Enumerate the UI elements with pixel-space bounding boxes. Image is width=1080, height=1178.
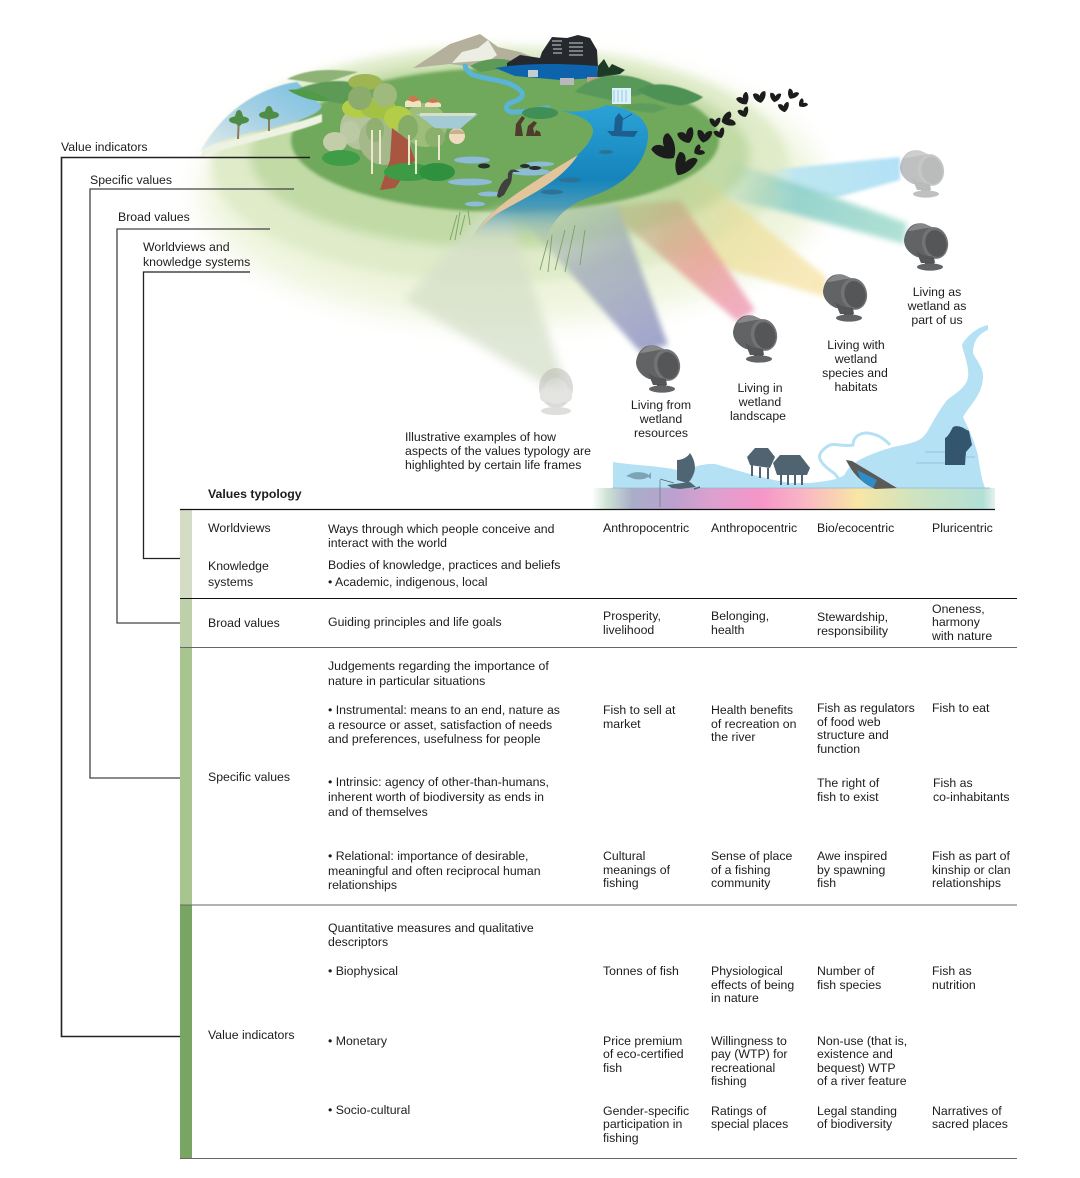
icon: lamp living as wetland <box>904 223 951 271</box>
beam: pale unlit lamp <box>405 207 565 385</box>
relational values: • Relational: importance of desirable, <box>328 849 528 863</box>
canoe <box>846 460 897 489</box>
sea and beach <box>200 82 322 152</box>
sailboat with fisher <box>677 453 695 483</box>
row: specific values <box>208 659 1011 892</box>
palm trees <box>229 106 279 139</box>
life frame label: in landscape: wetland <box>738 395 781 409</box>
row: value indicators: of eco-certified <box>603 1047 684 1061</box>
houses <box>528 70 538 77</box>
row: value indicators: Ratings of <box>711 1104 766 1118</box>
row: value indicators: sacred places <box>932 1117 1008 1131</box>
river <box>465 64 550 112</box>
row: specific values: Fish as <box>933 776 973 790</box>
icon: lamp living from resources <box>636 345 683 393</box>
row: specific values: community <box>711 876 771 890</box>
row: knowledge systems <box>208 558 560 589</box>
row: worldviews: interact with the world <box>328 536 447 550</box>
row: broad values: Stewardship, <box>817 610 888 624</box>
row: value indicators: fishing <box>711 1074 747 1088</box>
table rules <box>180 508 995 510</box>
landscape illustration <box>200 34 703 272</box>
bar: broad values <box>180 599 192 647</box>
row: value indicators: Physiological <box>711 964 783 978</box>
relational values: meaningful and often reciprocal human <box>328 864 541 878</box>
row: specific values: The right of <box>817 776 879 790</box>
row: specific values: Judgements regarding the importance of <box>328 659 549 673</box>
row: value indicators: bequest) WTP <box>817 1061 896 1075</box>
row: specific values: Fish to sell at <box>603 703 675 717</box>
row: value indicators: fish species <box>817 978 881 992</box>
row: value indicators: Fish as <box>932 964 972 978</box>
bracket label: value indicators: Value indicators <box>61 140 148 154</box>
row: specific values: structure and <box>817 728 889 742</box>
row: specific values: Specific values <box>208 770 290 784</box>
row: worldviews: Worldviews <box>208 521 271 535</box>
row: value indicators: descriptors <box>328 935 388 949</box>
row: specific values: Health benefits <box>711 703 793 717</box>
monetary indicators: • Monetary <box>328 1034 388 1048</box>
relational values: relationships <box>328 878 397 892</box>
row: value indicators: participation in <box>603 1117 682 1131</box>
bottom wetland scene <box>592 325 995 509</box>
waterfall <box>612 88 631 104</box>
row: broad values: Belonging, <box>711 609 769 623</box>
life frame label: with species: Living with <box>827 338 885 352</box>
row: value indicators: Price premium <box>603 1034 682 1048</box>
row: specific values: of recreation on <box>711 717 797 731</box>
ducks <box>478 164 541 170</box>
row: specific values: fish <box>817 876 836 890</box>
beam: living from wetland resources <box>510 205 668 352</box>
row: value indicators: special places <box>711 1117 788 1131</box>
row: value indicators: recreational <box>711 1061 775 1075</box>
row: value indicators <box>208 921 1008 1145</box>
row: specific values: of a fishing <box>711 863 771 877</box>
row: broad values: Oneness, <box>932 602 985 616</box>
row: specific values: by spawning <box>817 863 886 877</box>
background: nested value ellipses <box>202 47 822 322</box>
row: value indicators: Legal standing <box>817 1104 897 1118</box>
bracket: worldviews <box>144 272 250 558</box>
rice terraces <box>416 114 478 129</box>
giraffes and wildlife <box>522 107 558 119</box>
row: specific values: Cultural <box>603 849 645 863</box>
row: specific values: nature in particular situations <box>328 674 485 688</box>
colour strip <box>592 488 995 509</box>
row: specific values: kinship or clan <box>932 863 1011 877</box>
beam: living in wetland landscape <box>615 200 755 322</box>
row: knowledge systems: Bodies of knowledge, practices and beliefs <box>328 558 560 572</box>
row: worldviews: Bio/ecocentric <box>817 521 894 535</box>
beam: living with species <box>655 175 826 297</box>
hills left <box>287 70 358 84</box>
row: specific values: fishing <box>603 876 639 890</box>
row: value indicators: Tonnes of fish <box>603 964 679 978</box>
row: value indicators: Value indicators <box>208 1028 295 1042</box>
life frame label: with species: wetland <box>834 352 877 366</box>
city <box>507 35 598 68</box>
bracket label: specific values: Specific values <box>90 173 172 187</box>
boat and person <box>607 131 638 137</box>
water shape <box>613 325 988 488</box>
beam: pale blue <box>770 157 900 198</box>
row: broad values: Guiding principles and life goals <box>328 615 502 629</box>
illustrative examples note: highlighted by certain life frames <box>405 458 581 472</box>
instrumental values: • Instrumental: means to an end, nature as <box>328 703 560 717</box>
life frame label: in landscape: Living in <box>737 381 783 395</box>
row: worldviews: Pluricentric <box>932 521 993 535</box>
life frame label: with species: species and <box>822 366 888 380</box>
bar: specific values <box>180 648 192 905</box>
icon: lamp living in landscape <box>733 315 780 363</box>
forest <box>322 74 455 190</box>
row: value indicators: in nature <box>711 991 759 1005</box>
instrumental values: a resource or asset, satisfaction of needs <box>328 718 552 732</box>
life frame label: from resources: Living from <box>631 398 691 412</box>
row: specific values: Awe inspired <box>817 849 887 863</box>
life frame label: as wetland: Living as <box>913 285 961 299</box>
row: value indicators: fish <box>603 1061 622 1075</box>
row: value indicators: Non-use (that is, <box>817 1034 907 1048</box>
life frame label: from resources: resources <box>634 426 688 440</box>
bracket label: broad values: Broad values <box>118 210 190 224</box>
icon: lamp living with species <box>823 274 870 322</box>
row: broad values <box>208 602 992 643</box>
wet ponds <box>448 156 554 206</box>
table heading: Values typology <box>208 487 302 501</box>
life frame label: from resources: wetland <box>639 412 682 426</box>
row: value indicators: nutrition <box>932 978 976 992</box>
row: specific values: relationships <box>932 876 1001 890</box>
icon: pale front lamp <box>539 368 573 415</box>
row: broad values: livelihood <box>603 623 654 637</box>
row: knowledge systems: • Academic, indigenous, local <box>328 575 487 589</box>
life frame label: as wetland: wetland as <box>907 299 966 313</box>
row: value indicators: effects of being <box>711 978 794 992</box>
row: value indicators: Willingness to <box>711 1034 787 1048</box>
row: value indicators: existence and <box>817 1047 893 1061</box>
stilt houses <box>747 448 775 468</box>
table colour bars <box>180 510 192 1158</box>
bracket label: worldviews and knowledge systems: knowledge systems <box>143 255 250 269</box>
row: specific values: the river <box>711 730 755 744</box>
row: worldviews: Anthropocentric <box>711 521 797 535</box>
butterflies <box>649 88 808 180</box>
life frame label: in landscape: landscape <box>730 409 786 423</box>
row: value indicators: Gender-specific <box>603 1104 689 1118</box>
person with binoculars <box>945 426 972 465</box>
life frame label: with species: habitats <box>834 380 878 394</box>
row: broad values: responsibility <box>817 624 889 638</box>
mountains <box>413 34 535 70</box>
right hills <box>575 75 655 100</box>
row: specific values: Fish as part of <box>932 849 1010 863</box>
bracket: broad values <box>117 229 270 623</box>
row: broad values: Prosperity, <box>603 609 661 623</box>
socio-cultural indicators: • Socio-cultural <box>328 1103 410 1117</box>
row: broad values: with nature <box>931 629 992 643</box>
bar: worldviews and knowledge systems <box>180 510 192 598</box>
row: worldviews: Anthropocentric <box>603 521 689 535</box>
row: specific values: Fish as regulators <box>817 701 915 715</box>
row: specific values: fish to exist <box>817 790 879 804</box>
row: specific values: meanings of <box>603 863 671 877</box>
row: value indicators: pay (WTP) for <box>711 1047 788 1061</box>
value level brackets <box>62 158 310 1036</box>
bracket label: worldviews and knowledge systems: Worldviews and <box>143 240 230 254</box>
row: specific values: of food web <box>817 715 881 729</box>
intrinsic values: • Intrinsic: agency of other-than-humans, <box>328 775 549 789</box>
row: specific values: co-inhabitants <box>933 790 1010 804</box>
intrinsic values: and of themselves <box>328 805 428 819</box>
row: value indicators: of a river feature <box>817 1074 907 1088</box>
row: value indicators: fishing <box>603 1131 639 1145</box>
reeds <box>450 210 585 272</box>
bar: value indicators <box>180 905 192 1158</box>
biophysical indicators: • Biophysical <box>328 964 398 978</box>
icon: pale lamp top right <box>900 150 947 198</box>
row: value indicators: Narratives of <box>932 1104 1002 1118</box>
row: knowledge systems: systems <box>208 575 253 589</box>
intrinsic values: inherent worth of biodiversity as ends in <box>328 790 544 804</box>
row: specific values: function <box>817 742 860 756</box>
fish in river <box>541 150 613 194</box>
row: specific values: Sense of place <box>711 849 792 863</box>
river bank <box>478 155 578 232</box>
row: value indicators: Quantitative measures and qualitative <box>328 921 534 935</box>
illustrative examples note: aspects of the values typology are <box>405 444 591 458</box>
light beams from the life-frame lamps <box>405 157 907 385</box>
row: broad values: health <box>711 623 745 637</box>
bracket: specific values <box>90 189 294 778</box>
row: worldviews <box>208 521 993 550</box>
thin meander <box>819 433 890 484</box>
life frame label: as wetland: part of us <box>911 313 963 327</box>
instrumental values: and preferences, usefulness for people <box>328 732 541 746</box>
row: knowledge systems: Knowledge <box>208 559 269 573</box>
bracket: value indicators <box>62 158 310 1036</box>
row: worldviews: Ways through which people conceive and <box>328 522 554 536</box>
row: value indicators: Number of <box>817 964 874 978</box>
row: specific values: Fish to eat <box>932 701 990 715</box>
row: specific values: market <box>603 717 641 731</box>
heron <box>497 169 520 198</box>
beam: living as wetland <box>712 157 907 244</box>
row: broad values: harmony <box>932 615 981 629</box>
illustrative examples note: Illustrative examples of how <box>405 430 556 444</box>
row: broad values: Broad values <box>208 616 280 630</box>
fish <box>626 472 651 479</box>
row: value indicators: of biodiversity <box>817 1117 893 1131</box>
village huts <box>405 95 421 107</box>
